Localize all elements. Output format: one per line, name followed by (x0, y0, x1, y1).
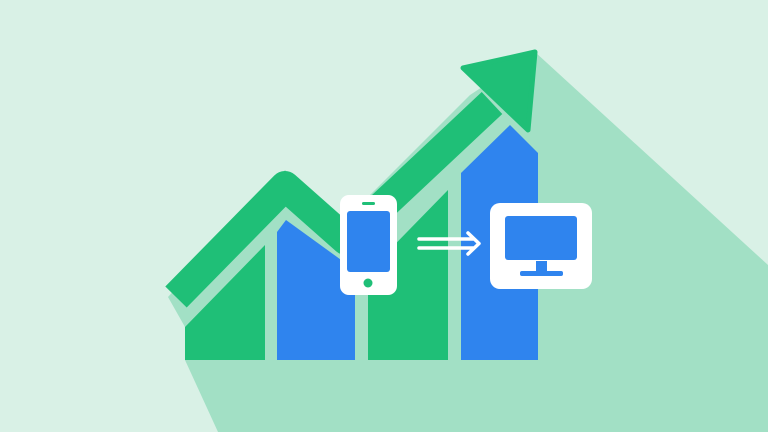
arrow: phone to monitor (419, 233, 479, 254)
bar 1 green (185, 245, 265, 360)
icon: phone (340, 195, 397, 295)
bar 2 blue (277, 220, 355, 360)
bar 3 green (368, 190, 448, 360)
icon: monitor (490, 203, 592, 289)
bar 4 blue (461, 125, 538, 360)
bar chart (185, 125, 538, 360)
long shadow (168, 52, 768, 432)
arrow: upward trend (176, 52, 535, 297)
